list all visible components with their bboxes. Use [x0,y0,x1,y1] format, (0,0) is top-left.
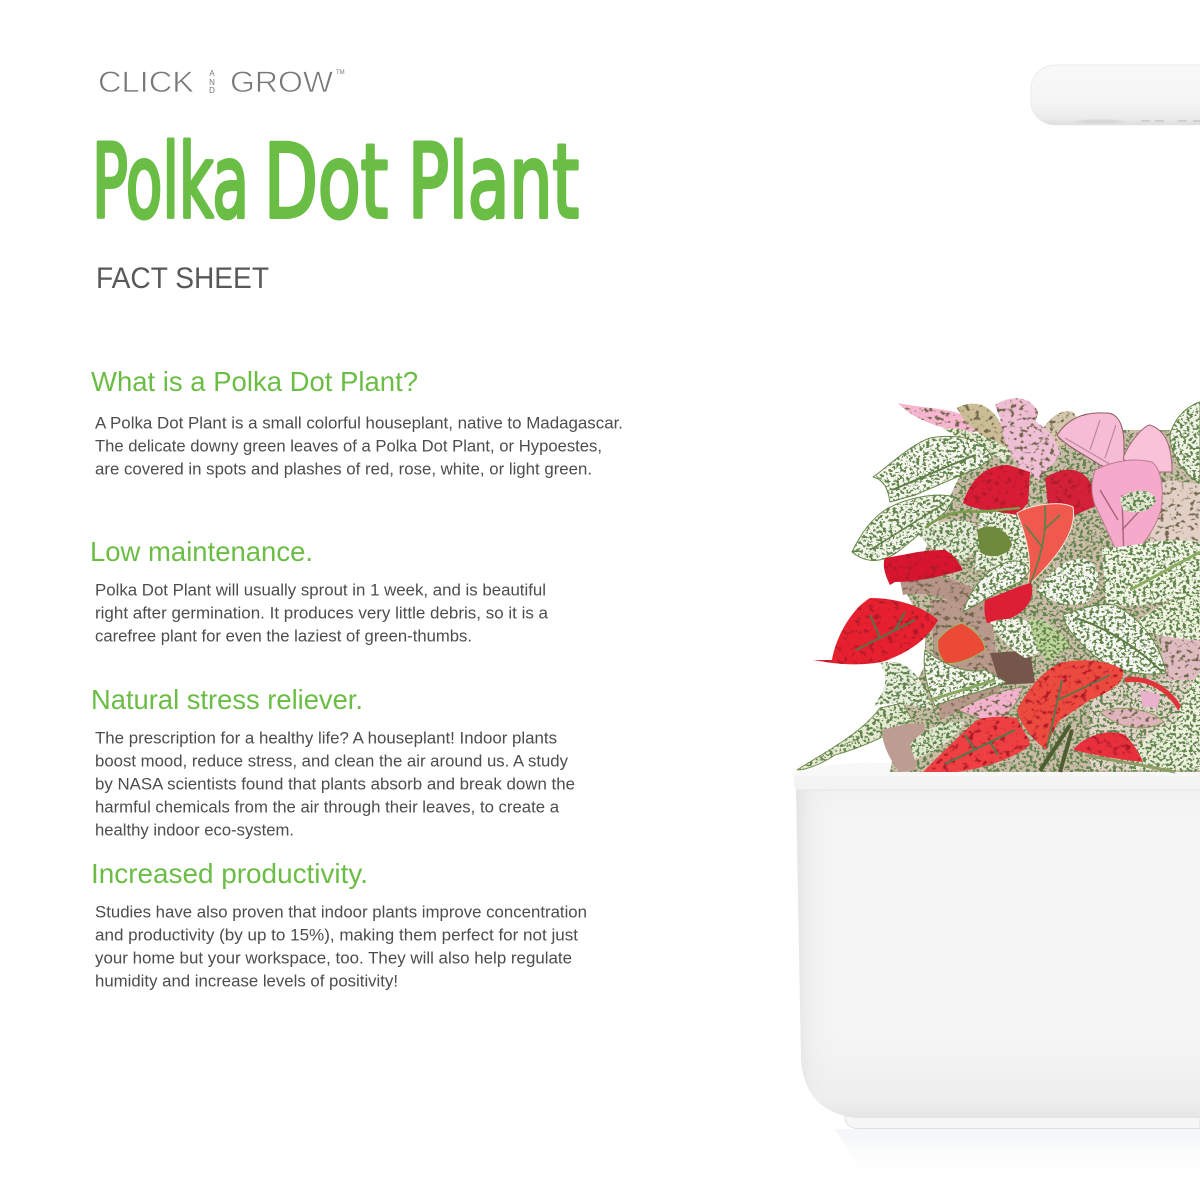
leaf: small white on pink [1120,491,1156,512]
subtitle: fact sheet: FACT SHEET [96,262,269,295]
leaf: mid left white [852,495,955,560]
leaf: right tan pale [1150,478,1200,548]
brand logo: Click and Grow: N [209,78,215,87]
leaf: right middle white [1102,540,1200,606]
leaf: underlay tan lower [930,600,1000,720]
planter lid [794,763,1200,790]
central stems [1040,725,1072,772]
leaf: right pink [1123,425,1172,472]
leaf: centre left white [917,508,1020,565]
leaf: red behind pink [1045,470,1098,515]
leaf: bottom tan [882,724,925,772]
text block: A Polka Dot Plant is a small colorful houseplant, native to Madagascar. [95,414,623,432]
text block: carefree plant for even the laziest of green-thumbs. [95,626,472,646]
leaf: small red [984,583,1032,623]
leaf: dark middle [990,650,1035,685]
heading: Natural stress reliever. [91,684,363,715]
leaf: dark green [977,526,1012,556]
text block [95,728,575,840]
brand logo: Click and Grow [98,66,345,99]
leaf: bottom right tail [1085,755,1175,772]
foliage backdrop [890,430,1200,772]
heading: Low maintenance. [90,536,313,567]
leaf: small coral [938,623,985,663]
leaf: pale tan middle [900,576,975,608]
leaf: lower left white [924,650,1006,706]
leaf: top right white [1170,402,1200,483]
section: low maintenance [90,536,549,646]
text block: humidity and increase levels of positivity! [95,972,398,990]
leaf: large red left [813,598,938,664]
leaf: centre coral [1017,504,1074,587]
leaf: underlay pale lower right [1090,670,1200,770]
leaf: pink right low [1140,690,1160,708]
leaf: right big white [1063,605,1166,674]
text block: and productivity (by up to 15%), making them perfect for not just [95,926,578,944]
text block: your home but your workspace, too. They will also help regulate [95,948,572,968]
text block: boost mood, reduce stress, and clean the air around us. A study [95,752,568,770]
heading: Increased productivity. [91,858,368,889]
planter base [845,1116,1200,1128]
text block: healthy indoor eco-system. [95,820,294,840]
title: Polka Dot Plant [92,123,579,242]
leaf: underlay white centre [975,510,1040,570]
title: Polka Dot Plant: Dot [264,123,388,242]
leaf: upper pink [1057,413,1124,475]
plant foliage [797,398,1200,772]
leaf: far left white [873,662,932,708]
leaf: red arching stem [1125,679,1188,755]
brand logo: Click and Grow: A [209,69,215,78]
brand logo: Click and Grow: TM [336,70,345,76]
leaf: upper left white [873,436,992,502]
brand logo: Click and Grow: D [209,86,215,95]
section: what is a polka dot plant [91,366,623,478]
leaf: low pink [958,687,1023,721]
planter body [796,785,1200,1118]
leaf: low red large [1017,660,1123,750]
text block: Polka Dot Plant will usually sprout in 1 week, and is beautiful [95,580,546,600]
leaf: long left white [797,703,912,770]
text block [95,902,587,990]
leaf: top pale strip [943,428,1012,462]
leaf: centre white [963,561,1029,612]
leaf: bottom white green [910,722,965,760]
leaf: right pink tan [1160,625,1200,680]
leaf: top tan [957,404,1005,448]
heading: What is a Polka Dot Plant? [91,366,418,397]
brand logo: Click and Grow: CLICK [98,66,194,99]
leaf: top left pink [898,403,978,432]
planter [794,763,1200,1128]
leaf: top tan right [1037,411,1083,448]
leaf: middle white lower [990,619,1046,658]
leaf: right edge white [1160,672,1200,770]
text block: harmful chemicals from the air through their leaves, to create a [95,798,560,816]
leaf: large pink [1092,460,1162,564]
leaf: right low pale pink [1100,708,1164,728]
title: Polka Dot Plant: Plant [408,123,579,242]
leaf: upper red [963,465,1030,515]
text block: The delicate downy green leaves of a Polka Dot Plant, or Hypoestes, [95,436,602,456]
text block: right after germination. It produces very little debris, so it is a [95,604,549,622]
leaf: left dark red [884,550,963,585]
section: increased productivity [91,858,587,990]
text block: are covered in spots and plashes of red, rose, white, or light green. [95,460,592,478]
leaf: top speckled pink [995,398,1038,425]
section: natural stress reliever [91,684,575,840]
brand logo: Click and Grow: GROW [230,66,334,99]
text block [95,580,549,646]
leaf: bottom red right [1073,732,1143,762]
leaf: bottom red left [923,717,1030,772]
text block: Studies have also proven that indoor plants improve concentration [95,902,587,922]
leaf: green lower middle [1030,618,1070,662]
leaf: bottom right white [1130,723,1173,770]
floor reflection [835,1129,1200,1170]
text block: The prescription for a healthy life? A houseplant! Indoor plants [95,728,557,748]
text block: by NASA scientists found that plants absorb and break down the [95,774,575,794]
leaf: upper pink stem [1000,414,1060,480]
leaf: middle white [1038,559,1098,605]
text block [95,414,623,478]
leaf: right lower white [1133,590,1200,640]
title: Polka Dot Plant: Polka [92,123,249,242]
grow lamp [1031,65,1200,125]
